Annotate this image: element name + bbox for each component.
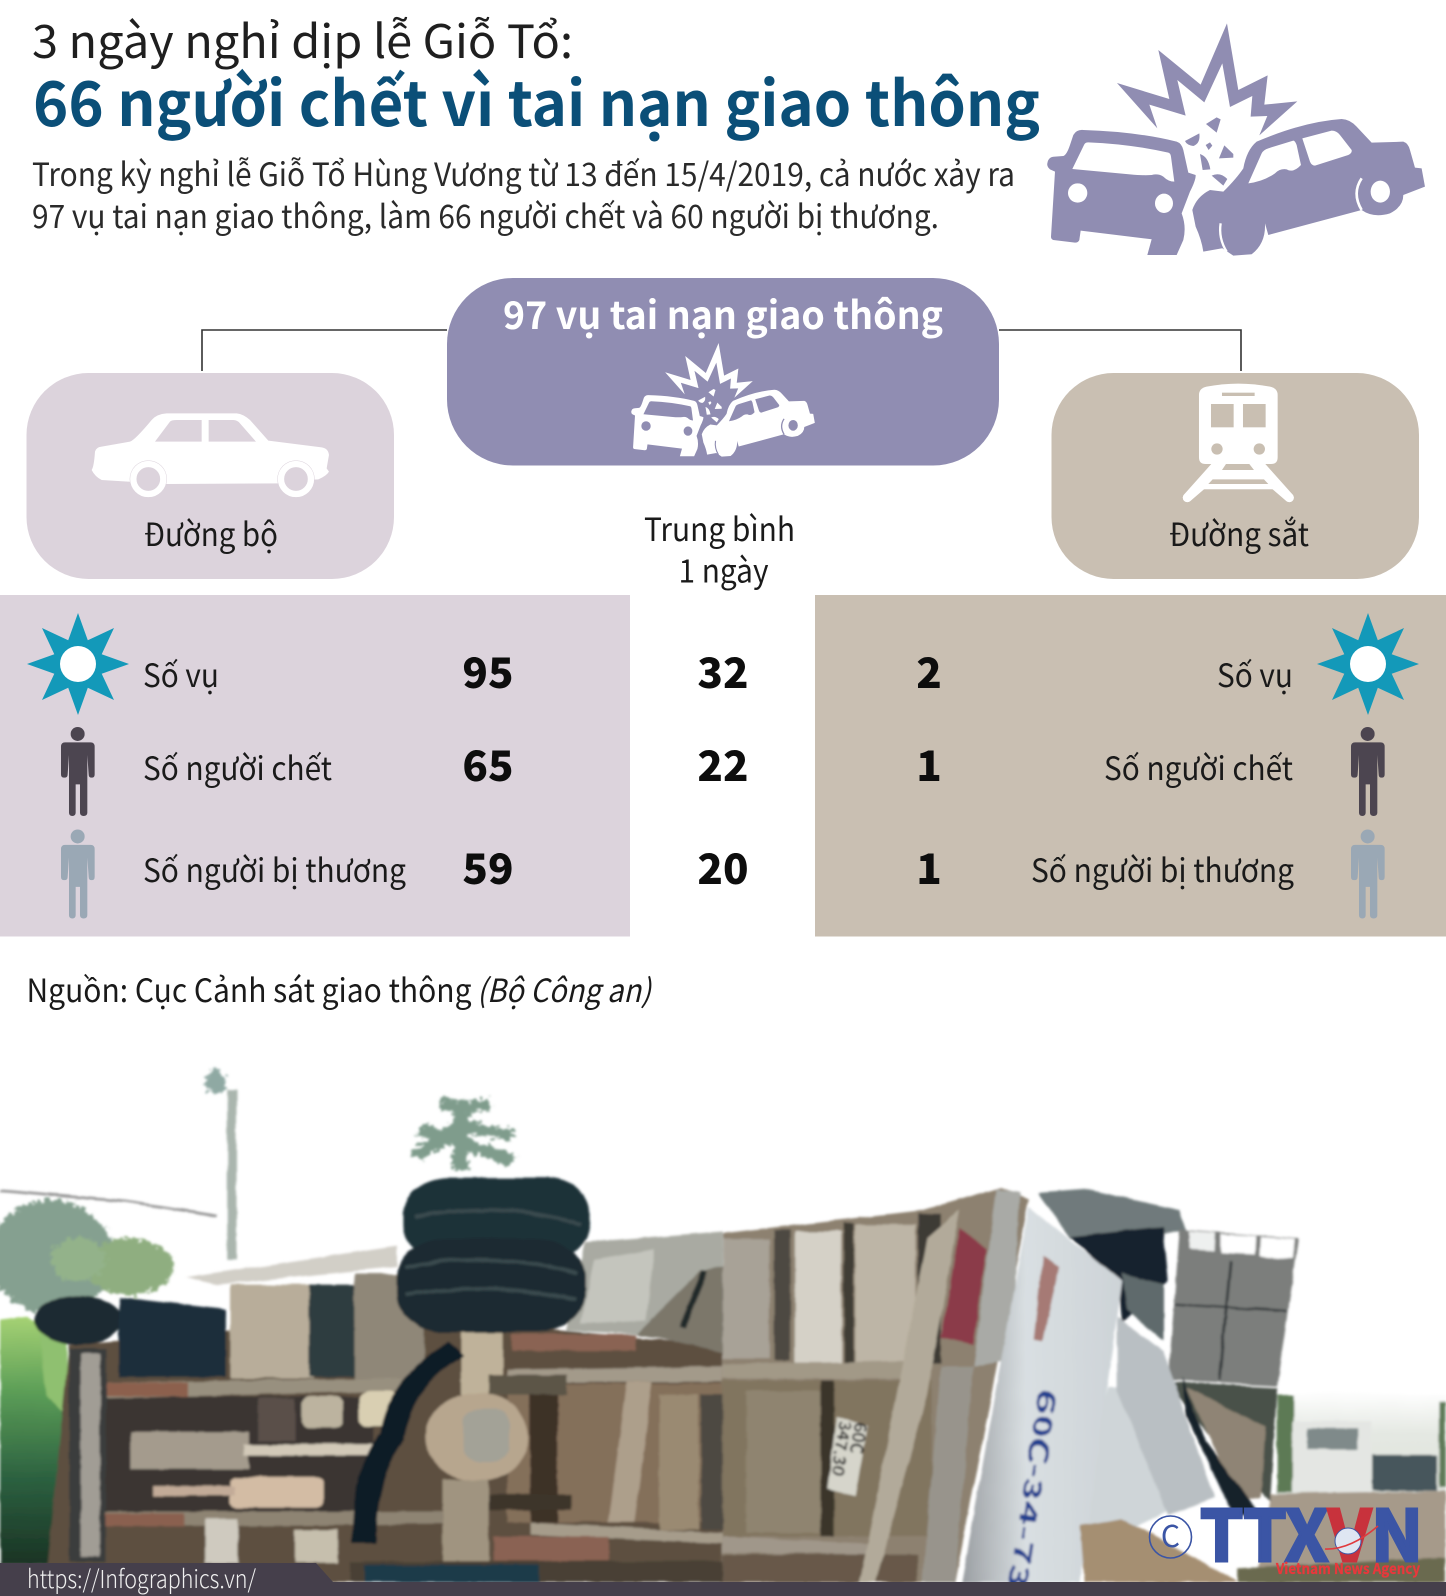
logo: TTXVN: TTXVN xyxy=(1200,1481,1423,1582)
panel: total accidents xyxy=(447,278,999,466)
title line 2: 66 người chết vì tai nạn giao thông xyxy=(33,54,1040,144)
rail numbers xyxy=(916,640,942,897)
road numbers: 95 xyxy=(462,640,514,701)
label: daily average xyxy=(644,505,795,592)
title line 1: 3 ngày nghỉ dịp lễ Giỗ Tổ: xyxy=(32,6,573,72)
daily average numbers: 20 xyxy=(697,836,749,897)
daily average numbers: 22 xyxy=(697,733,749,794)
road labels: Số người chết xyxy=(143,744,332,790)
panel: road statistics xyxy=(0,595,630,936)
connector: left xyxy=(202,330,447,371)
logo: TTXVN: C xyxy=(1161,1512,1180,1556)
connector: right xyxy=(999,330,1241,371)
intro paragraph: Trong kỳ nghỉ lễ Giỗ Tổ Hùng Vương từ 13 đến 15/4/2019, cả nước xảy ra xyxy=(32,150,1015,196)
source: Nguồn: Cục Cảnh sát giao thông xyxy=(26,966,472,1012)
footer bar xyxy=(0,1560,1446,1596)
road labels: Số vụ xyxy=(143,651,219,697)
icon: car xyxy=(92,413,329,498)
rail numbers: 2 xyxy=(916,640,942,701)
rail numbers: 1 xyxy=(916,733,942,794)
icon: injured xyxy=(1351,829,1385,918)
panel: road xyxy=(26,373,394,579)
icon: deaths xyxy=(61,727,95,816)
rail labels xyxy=(1031,651,1294,892)
icon: accidents xyxy=(1317,613,1419,715)
icon: train xyxy=(1187,384,1289,502)
panel: rail statistics xyxy=(815,595,1446,936)
license plate in photo: 347.30 xyxy=(826,1419,859,1478)
label: daily average: 1 ngày xyxy=(678,546,769,592)
road numbers xyxy=(462,640,514,897)
intro paragraph: 97 vụ tai nạn giao thông, làm 66 người chết và 60 người bị thương. xyxy=(32,192,939,238)
road numbers: 65 xyxy=(462,733,514,794)
daily average numbers: 32 xyxy=(697,640,749,701)
icon: deaths xyxy=(1351,727,1385,816)
road labels xyxy=(143,651,406,892)
license plate in photo xyxy=(826,1419,875,1480)
icon: car crash header xyxy=(1047,23,1425,256)
daily average numbers xyxy=(697,640,749,897)
rail labels: Số người bị thương xyxy=(1031,846,1294,892)
label: daily average: Trung bình xyxy=(644,505,795,551)
road numbers: 59 xyxy=(462,836,514,897)
photo: overturned truck xyxy=(0,1070,1446,1591)
icon: accidents xyxy=(27,613,129,715)
road labels: Số người bị thương xyxy=(143,846,406,892)
license plate in photo: 60C xyxy=(846,1421,875,1456)
icon: car crash white xyxy=(631,343,815,457)
foliage xyxy=(0,1070,512,1313)
intro paragraph xyxy=(32,150,1015,238)
label: rail: Đường sắt xyxy=(1169,510,1309,556)
footer url: https://Infographics.vn/ xyxy=(27,1560,256,1596)
total heading: 97 vụ tai nạn giao thông xyxy=(503,285,943,340)
label: road: Đường bộ xyxy=(144,510,278,556)
rail labels: Số người chết xyxy=(1104,744,1293,790)
rail numbers: 1 xyxy=(916,836,942,897)
logo: TTXVN: Vietnam News Agency xyxy=(1275,1558,1420,1579)
rail labels: Số vụ xyxy=(1217,651,1293,697)
panel: rail xyxy=(1052,373,1419,579)
icon: injured xyxy=(61,829,95,918)
door lettering in photo: 60C-34-73 xyxy=(1000,1388,1068,1591)
source: (Bộ Công an) xyxy=(477,966,652,1012)
